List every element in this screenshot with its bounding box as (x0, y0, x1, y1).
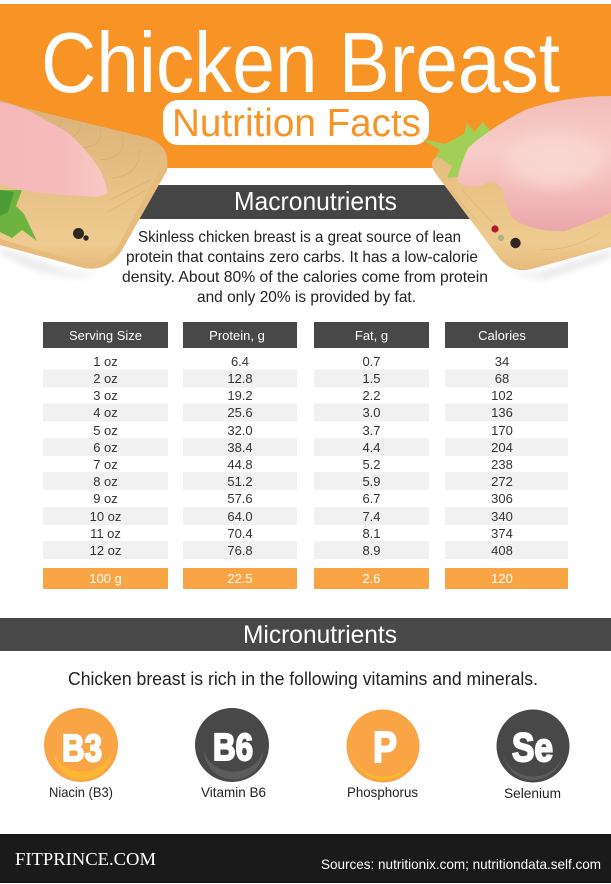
table column: calories: 408 (491, 543, 513, 558)
left cutting board with chicken (0, 100, 168, 278)
table column: serving size (90, 354, 121, 558)
table column: protein: 51.2 (227, 474, 253, 489)
chicken left (0, 102, 107, 197)
table column: serving size: 7 oz (93, 457, 118, 472)
badge: niacin B3: Niacin (B3) (49, 784, 113, 800)
micronutrients intro: Chicken breast is rich in the following vitamins and minerals. (68, 669, 538, 689)
table column: serving size: 3 oz (93, 388, 118, 403)
intro paragraph: and only 20% is provided by fat. (197, 289, 416, 306)
table column: calories: 102 (491, 388, 513, 403)
badge: niacin B3 (44, 708, 118, 800)
table column: serving size: 1 oz (93, 354, 118, 369)
table column: fat (362, 354, 381, 558)
icon: dill left (0, 190, 37, 241)
badge: vitamin B6 (195, 708, 269, 800)
badge: selenium: Se (512, 726, 553, 770)
table column: protein: 25.6 (227, 405, 253, 420)
table column: fat: 1.5 (362, 371, 381, 386)
table column: protein: 70.4 (227, 526, 253, 541)
badge: vitamin B6: Vitamin B6 (201, 784, 266, 800)
table column: fat: 5.9 (362, 474, 381, 489)
table column: protein: 12.8 (227, 371, 253, 386)
table column: serving size: 8 oz (93, 474, 118, 489)
table column: protein: 6.4 (231, 354, 249, 369)
table column: protein: 76.8 (227, 543, 253, 558)
table summary row: 100 g: 100 g (89, 571, 122, 586)
micronutrients band (0, 618, 611, 651)
table column: fat: 7.4 (362, 509, 381, 524)
table column: calories: 374 (491, 526, 513, 541)
intro paragraph: protein that contains zero carbs. It has a low-calorie (126, 249, 478, 266)
table column: fat: 3.0 (362, 405, 381, 420)
right cutting board with chicken (422, 96, 611, 279)
table column: fat: 0.7 (362, 354, 381, 369)
table summary row: 100 g: 2.6 (362, 571, 381, 586)
table column: calories: 204 (491, 440, 513, 455)
table column: protein: 64.0 (227, 509, 253, 524)
table column: calories: 306 (491, 491, 513, 506)
table summary row: 100 g (43, 568, 568, 589)
table column: fat: 8.1 (362, 526, 381, 541)
badge: selenium (496, 710, 570, 801)
table column: fat: 6.7 (362, 491, 381, 506)
intro paragraph (122, 229, 488, 306)
table column: protein: 44.8 (227, 457, 253, 472)
footer sources: Sources: nutritionix.com; nutritiondata.self.com (321, 856, 601, 872)
table column: fat: 3.7 (362, 423, 381, 438)
table column: protein (227, 354, 253, 558)
table headers: Calories (478, 328, 526, 343)
table headers: Serving Size (69, 328, 142, 343)
macronutrients band (130, 185, 475, 219)
table column: serving size: 9 oz (93, 491, 118, 506)
table row stripes (43, 370, 568, 559)
table headers: Fat, g (355, 328, 388, 343)
footer brand: FITPRINCE.COM (15, 849, 156, 869)
subtitle pill: Nutrition Facts (172, 102, 421, 145)
footer bar (0, 834, 611, 883)
table column: protein: 57.6 (227, 491, 253, 506)
table column: protein: 32.0 (227, 423, 253, 438)
icon: dill right (422, 122, 490, 178)
table column: calories: 272 (491, 474, 513, 489)
intro paragraph: Skinless chicken breast is a great source of lean (138, 229, 461, 246)
badge: phosphorus (346, 710, 420, 800)
micronutrients band: Micronutrients (243, 621, 397, 649)
badge: vitamin B6: B6 (213, 727, 253, 769)
badge: phosphorus: Phosphorus (347, 784, 418, 800)
header orange band (0, 4, 611, 168)
badge: niacin B3: B3 (62, 728, 102, 770)
table column: calories: 170 (491, 423, 513, 438)
table column: serving size: 5 oz (93, 423, 118, 438)
macronutrients band: Macronutrients (234, 186, 397, 216)
table column: serving size: 2 oz (93, 371, 118, 386)
icon: peppercorns left (73, 228, 89, 241)
chicken right (457, 96, 611, 231)
table column: serving size: 4 oz (93, 405, 118, 420)
table column: fat: 2.2 (362, 388, 381, 403)
table column: protein: 38.4 (227, 440, 253, 455)
table column: calories: 136 (491, 405, 513, 420)
table column: calories: 68 (495, 371, 509, 386)
table summary row: 100 g: 22.5 (227, 571, 253, 586)
icon: peppercorns right (491, 225, 521, 248)
table column: serving size: 11 oz (90, 526, 121, 541)
table column: calories: 238 (491, 457, 513, 472)
table column: serving size: 10 oz (90, 509, 121, 524)
table column: calories (491, 354, 513, 558)
intro paragraph: density. About 80% of the calories come from protein (122, 269, 488, 286)
table column: calories: 340 (491, 509, 513, 524)
title: Chicken Breast (41, 16, 560, 111)
table summary row: 100 g: 120 (491, 571, 513, 586)
badge: phosphorus: P (373, 723, 397, 772)
table headers: Protein, g (209, 328, 265, 343)
badge: selenium: Selenium (504, 785, 561, 801)
table column: calories: 34 (495, 354, 509, 369)
table column: fat: 4.4 (362, 440, 381, 455)
table column: serving size: 12 oz (90, 543, 121, 558)
table column: protein: 19.2 (227, 388, 253, 403)
table column: fat: 5.2 (362, 457, 381, 472)
table headers (43, 322, 568, 348)
table column: fat: 8.9 (362, 543, 381, 558)
table column: serving size: 6 oz (93, 440, 118, 455)
